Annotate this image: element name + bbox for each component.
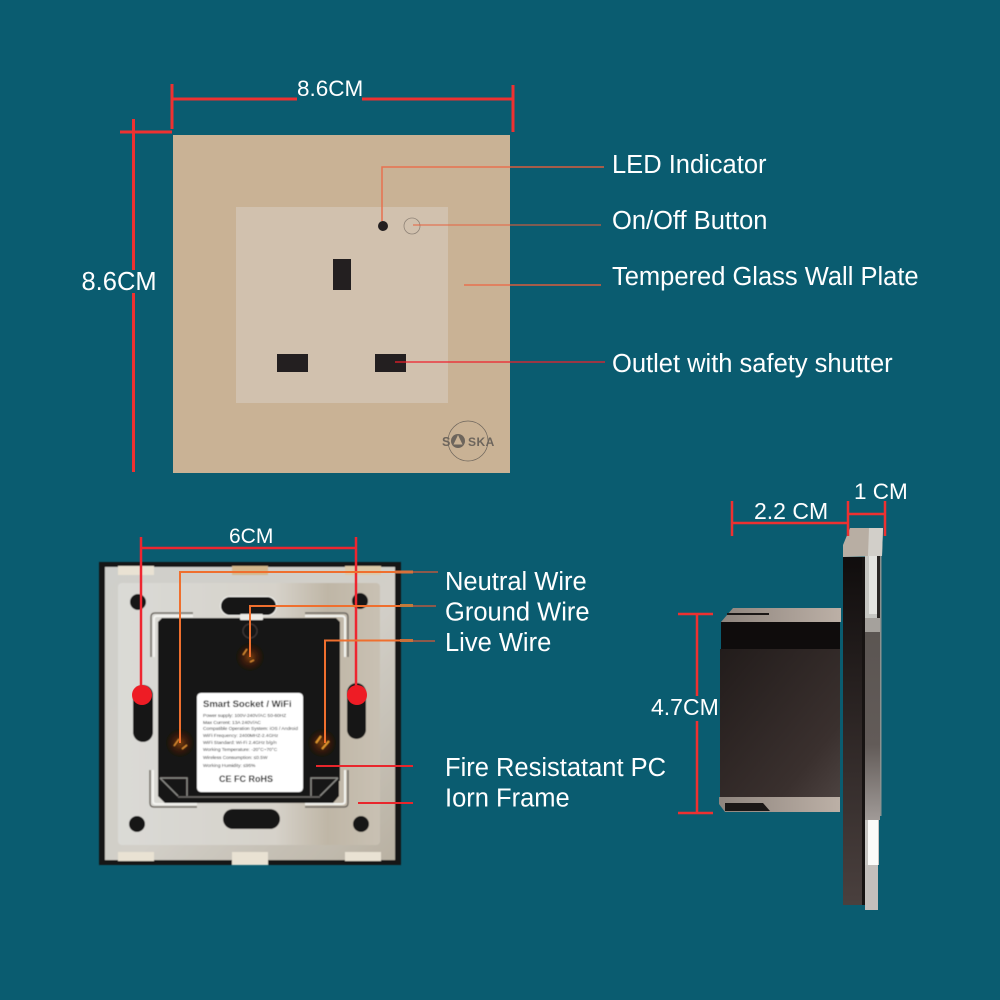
callout: On/Off Button: On/Off Button <box>612 207 767 235</box>
callout: Ground Wire <box>250 598 590 657</box>
product label: CE FC RoHS <box>219 774 273 784</box>
outlet: left pin slot <box>277 354 308 372</box>
dimension: plate depth 1 CM: 1 CM <box>854 479 908 504</box>
glass plate top facet <box>868 528 883 556</box>
product label: Working Humidity: ≤95% <box>203 763 256 769</box>
body bottom edge <box>178 796 320 798</box>
dimension: front height 8.6CM: 8.6CM <box>82 268 157 296</box>
callout: Live Wire: Live Wire <box>445 629 551 657</box>
recess outlines <box>150 613 348 807</box>
dimension: mounting width 6CM <box>132 525 367 705</box>
on/off button ring <box>404 218 420 234</box>
body corner clips <box>160 778 338 796</box>
logo: SASKA: S <box>442 435 450 449</box>
rear body bottom lip <box>719 797 840 812</box>
wall plate shadow edge <box>862 557 865 905</box>
glass plate top chamfer <box>843 528 883 557</box>
red mounting point left <box>132 685 152 705</box>
metal frame middle section <box>865 618 880 820</box>
panel: socket side view <box>719 528 883 910</box>
dimension: depth 2.2 CM <box>732 498 848 536</box>
dimension: mounting width 6CM: 6CM <box>229 525 273 548</box>
callout: Outlet with safety shutter: Outlet with safety shutter <box>612 350 893 378</box>
callout: LED Indicator <box>382 151 767 221</box>
product label: Compatible Operation System: iOS / Android <box>203 726 298 732</box>
callout: Fire Resistatant PC: Fire Resistatant PC <box>445 754 666 782</box>
callout: Tempered Glass Wall Plate: Tempered Glass Wall Plate <box>612 263 919 291</box>
callout: Iorn Frame: Iorn Frame <box>445 784 570 812</box>
wall plate edge <box>843 557 863 905</box>
panel: socket rear view <box>99 562 401 865</box>
rear body bottom notch <box>725 803 770 811</box>
mounting holes <box>129 593 369 832</box>
dimension: front width 8.6CM: 8.6CM <box>297 76 363 101</box>
screw terminal: neutral <box>166 729 194 757</box>
inner socket panel <box>236 207 448 403</box>
product label: Wireless Consumption: ≤0.5W <box>203 755 268 761</box>
product label: Max Current: 13A 240V/AC <box>203 720 261 726</box>
fire resistant PC body <box>158 618 340 803</box>
rear body dark band <box>721 622 840 649</box>
screw terminal: live <box>308 729 336 757</box>
screw terminal: ground <box>236 624 264 671</box>
frame inner panel <box>118 583 380 845</box>
rear body top slot <box>727 613 769 615</box>
frame tabs <box>118 566 381 865</box>
callout: Neutral Wire: Neutral Wire <box>445 568 587 596</box>
iron frame outer edge <box>99 562 401 865</box>
dimension: body height 4.7CM <box>651 614 719 813</box>
callout: LED Indicator: LED Indicator <box>612 151 767 179</box>
rear body top lip <box>721 608 841 622</box>
outlet: top pin slot <box>333 259 351 290</box>
rear body <box>720 649 840 797</box>
product label: Power supply: 100V-240V/AC 50-60HZ <box>203 713 286 719</box>
product label: Working Temperature: -20°C~70°C <box>203 747 278 753</box>
metal frame upper section <box>865 556 882 816</box>
callout: Live Wire <box>325 629 551 743</box>
dimension: front height 8.6CM <box>82 119 172 472</box>
body top notch <box>240 614 263 620</box>
LED indicator dot <box>378 221 388 231</box>
product label: WiFi Standard: Wi-Fi 2.4GHz b/g/n <box>203 740 277 746</box>
callout: Neutral Wire <box>180 568 587 743</box>
logo: SASKA <box>442 421 495 461</box>
dimension: depth 2.2 CM: 2.2 CM <box>754 498 828 524</box>
dimension: body height 4.7CM: 4.7CM <box>651 694 719 720</box>
product label: Smart Socket / WiFi <box>203 699 292 710</box>
logo: SASKA: SKA <box>468 435 495 449</box>
dimension: front width 8.6CM <box>172 76 513 132</box>
red mounting point right <box>347 685 367 705</box>
panel: socket front view <box>173 135 510 473</box>
product label: WiFi Frequency: 2400MHZ-2.4GHz <box>203 733 279 739</box>
product label <box>197 693 303 792</box>
tempered glass wall plate <box>173 135 510 473</box>
outlet: right pin slot <box>375 354 406 372</box>
callout: Ground Wire: Ground Wire <box>445 598 590 626</box>
metal frame lower section <box>865 820 879 910</box>
dimension: plate depth 1 CM <box>848 479 908 536</box>
iron frame silver plate <box>105 567 395 860</box>
